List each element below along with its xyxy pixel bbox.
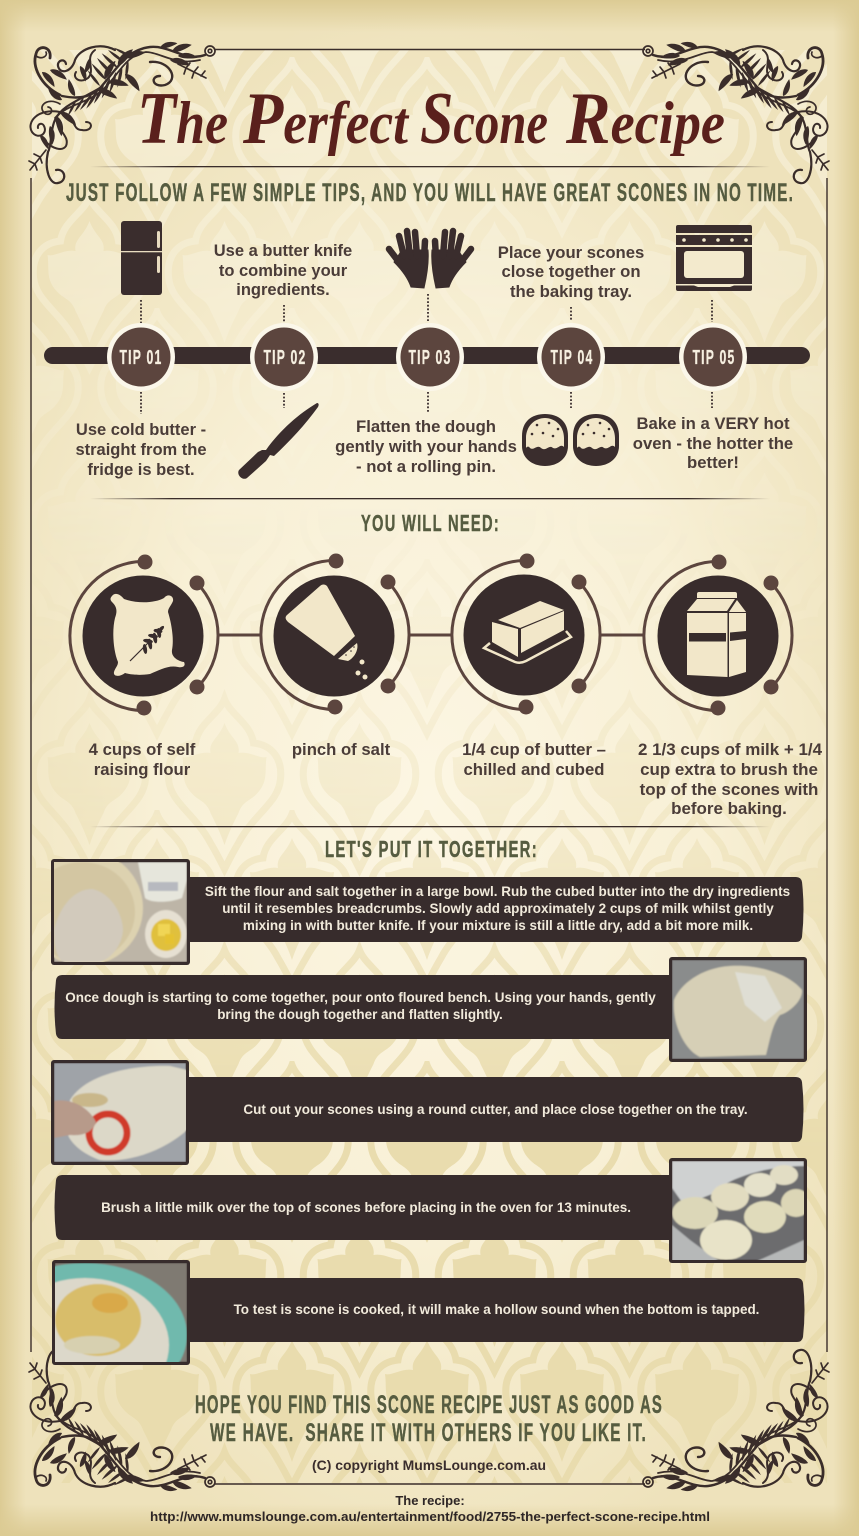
- ingredient text: milk: 2 1/3 cups of milk + 1/4: [638, 740, 823, 759]
- recipe source: The recipe:: [395, 1493, 465, 1508]
- tip 01 marker: TIP 01: [120, 347, 162, 369]
- corner ornament: top right: [643, 40, 829, 183]
- heading: let's put it together: LET'S PUT IT TOGETHER:: [325, 836, 538, 862]
- tip 2 text: to combine your: [219, 262, 348, 280]
- step 2 text: bring the dough together and flatten slightly.: [217, 1007, 503, 1022]
- tip 4 text: close together on: [501, 262, 641, 281]
- ingredient text: milk: before baking.: [671, 799, 787, 818]
- ingredient text: milk: top of the scones with: [640, 780, 818, 799]
- corner ornament: top left: [29, 40, 215, 183]
- tips timeline: [44, 294, 810, 414]
- step 3: [51, 1060, 804, 1165]
- recipe source: http://www.mumslounge.com.au/entertainment/food/2755-the-perfect-scone-recipe.html: [150, 1509, 710, 1524]
- tip 2 text: Use a butter knife: [214, 242, 352, 260]
- connector dots: [141, 294, 712, 414]
- copyright: (C) copyright MumsLounge.com.au: [312, 1458, 546, 1473]
- tip 4 text: the baking tray.: [510, 282, 632, 301]
- icon: knife: [238, 403, 319, 479]
- step 5 text: To test is scone is cooked, it will make a hollow sound when the bottom is tapped.: [234, 1302, 759, 1317]
- tip 05 marker: TIP 05: [692, 347, 736, 369]
- ingredient: salt: [261, 554, 409, 714]
- title: The: [137, 78, 228, 160]
- title: [137, 78, 725, 160]
- step 2: [54, 957, 807, 1062]
- tip 04 marker: TIP 04: [550, 347, 594, 369]
- tip 4 text: Place your scones: [498, 243, 644, 262]
- closing message: [195, 1391, 663, 1447]
- tip 1 text: Use cold butter -: [76, 421, 206, 439]
- tip 01 marker: [107, 323, 175, 391]
- ingredient text: salt: pinch of salt: [292, 740, 391, 759]
- connector lines: [219, 634, 644, 636]
- tip 1 text: fridge is best.: [87, 461, 195, 479]
- heading: you will need: YOU WILL NEED:: [361, 510, 500, 536]
- tip 5 text: Bake in a VERY hot: [636, 414, 790, 433]
- step 2 text: Once dough is starting to come together, pour onto floured bench. Using your hands, gently: [65, 990, 656, 1005]
- step 5 photo: [52, 1260, 190, 1365]
- corner ornament: bottom left: [29, 1350, 215, 1493]
- tip 03 marker: TIP 03: [408, 347, 452, 369]
- tip 05 marker: [679, 323, 747, 391]
- tip 04 marker: [537, 323, 605, 391]
- step 2 bar: [54, 975, 672, 1039]
- tip 1 text: straight from the: [75, 441, 207, 459]
- step 2 photo: [669, 957, 807, 1062]
- recipe source: [150, 1493, 710, 1524]
- step 5 bar: [188, 1278, 804, 1342]
- step 4 bar: [54, 1175, 672, 1240]
- step 1 photo: [51, 859, 190, 965]
- step 1 text: until it resembles breadcrumbs. Slowly add approximately 2 cups of milk whilst gently: [222, 901, 774, 916]
- tip 3 text: gently with your hands: [335, 437, 517, 456]
- tip 02 marker: [250, 323, 318, 391]
- ingredient text: butter: 1/4 cup of butter –: [462, 740, 606, 759]
- tip 3 text: Flatten the dough: [356, 417, 496, 436]
- step 5: [52, 1260, 804, 1365]
- tip 02 marker: TIP 02: [264, 347, 306, 369]
- step 1 text: Sift the flour and salt together in a large bowl. Rub the cubed butter into the dry ingredients: [205, 884, 790, 899]
- ingredients row: [70, 554, 792, 716]
- icon: fridge: [121, 221, 162, 295]
- tip 5 text: oven - the hotter the: [633, 434, 793, 453]
- icon: scones: [522, 414, 619, 466]
- title: Scone: [420, 78, 548, 160]
- step 3 text: Cut out your scones using a round cutter, and place close together on the tray.: [243, 1102, 748, 1117]
- corner ornament: bottom right: [643, 1350, 829, 1493]
- title: Perfect: [242, 78, 410, 160]
- ingredient text: butter: chilled and cubed: [464, 760, 604, 779]
- ingredient text: flour: 4 cups of self: [89, 740, 196, 759]
- icon: hands: [389, 231, 471, 288]
- step 4: [54, 1158, 811, 1263]
- tip 3 text: - not a rolling pin.: [356, 457, 496, 476]
- title: Recipe: [565, 78, 725, 160]
- step 4 text: Brush a little milk over the top of scones before placing in the oven for 13 minutes.: [101, 1200, 631, 1215]
- step 1: [51, 859, 804, 965]
- step 3 photo: [51, 1060, 189, 1165]
- ingredient: flour: [70, 554, 218, 716]
- step 1 bar: [187, 877, 804, 942]
- tip 2 text: ingredients.: [236, 281, 330, 299]
- tip 5 text: better!: [687, 453, 739, 472]
- ingredient: butter: [452, 554, 600, 714]
- icon: oven: [676, 225, 752, 291]
- step 4 photo: [669, 1158, 811, 1263]
- ingredient text: milk: cup extra to brush the: [640, 760, 818, 779]
- ingredient text: flour: raising flour: [94, 760, 191, 779]
- tip 03 marker: [396, 323, 464, 391]
- step 1 text: mixing in with butter knife. If your mixture is still a little dry, add a bit more milk.: [243, 918, 753, 933]
- timeline bar: [44, 347, 810, 364]
- step 3 bar: [187, 1077, 804, 1142]
- ingredient: milk: [644, 554, 792, 716]
